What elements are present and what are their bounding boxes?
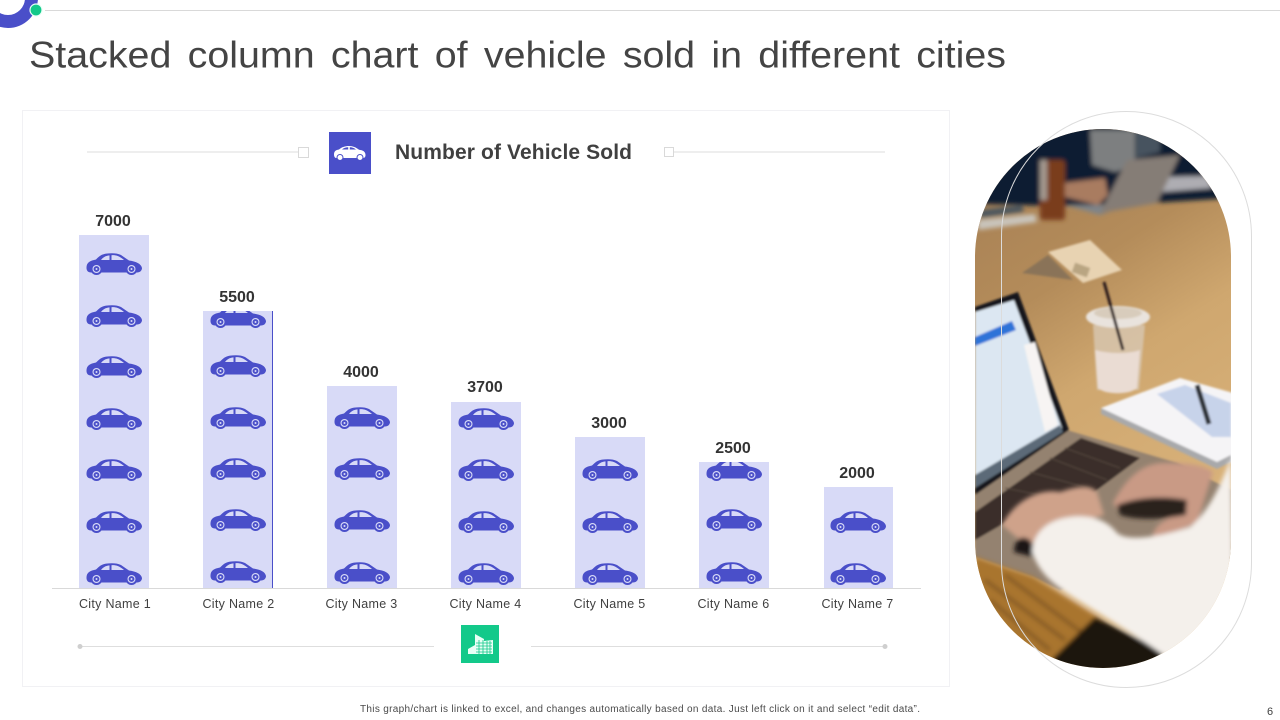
column: City Name 3 xyxy=(327,364,397,588)
column: City Name 2 xyxy=(203,289,273,588)
photo: person working on a laptop at a wooden table xyxy=(970,125,1240,680)
column: City Name 1 xyxy=(79,213,149,588)
footnote: This graph/chart is linked to excel, and changes automatically based on data. Just left click on it and select “edit data”. xyxy=(360,704,920,715)
decorative corner ring xyxy=(0,0,1280,28)
axis labels: City Name 5 xyxy=(573,597,646,611)
chart footer with icon xyxy=(78,625,888,663)
axis labels xyxy=(79,597,894,611)
icon: car xyxy=(329,132,371,174)
axis labels: City Name 7 xyxy=(821,597,894,611)
decorative outline around photo xyxy=(1002,112,1252,688)
title: Stacked column chart of vehicle sold in different cities xyxy=(29,34,1006,76)
icon: buildings xyxy=(461,625,499,663)
chart heading: Number of Vehicle Sold xyxy=(395,141,632,164)
column: City Name 6 xyxy=(699,440,769,588)
chart header xyxy=(87,132,885,174)
axis labels: City Name 2 xyxy=(202,597,275,611)
axis labels: City Name 6 xyxy=(697,597,770,611)
axis labels: City Name 4 xyxy=(449,597,522,611)
column: City Name 1: 7000 xyxy=(95,213,131,230)
column: City Name 7 xyxy=(824,465,893,588)
axis labels: City Name 3 xyxy=(325,597,398,611)
axis labels: City Name 1 xyxy=(79,597,151,611)
panel: chart xyxy=(22,110,950,686)
page number: 6 xyxy=(1267,706,1273,718)
column: City Name 2: 5500 xyxy=(219,289,255,306)
column: City Name 6: 2500 xyxy=(715,440,751,457)
column: City Name 4: 3700 xyxy=(467,379,503,396)
column: City Name 5 xyxy=(575,415,645,588)
column: City Name 5: 3000 xyxy=(591,415,627,432)
column: City Name 4 xyxy=(451,379,521,588)
column: City Name 3: 4000 xyxy=(343,364,379,381)
column: City Name 7: 2000 xyxy=(839,465,875,482)
